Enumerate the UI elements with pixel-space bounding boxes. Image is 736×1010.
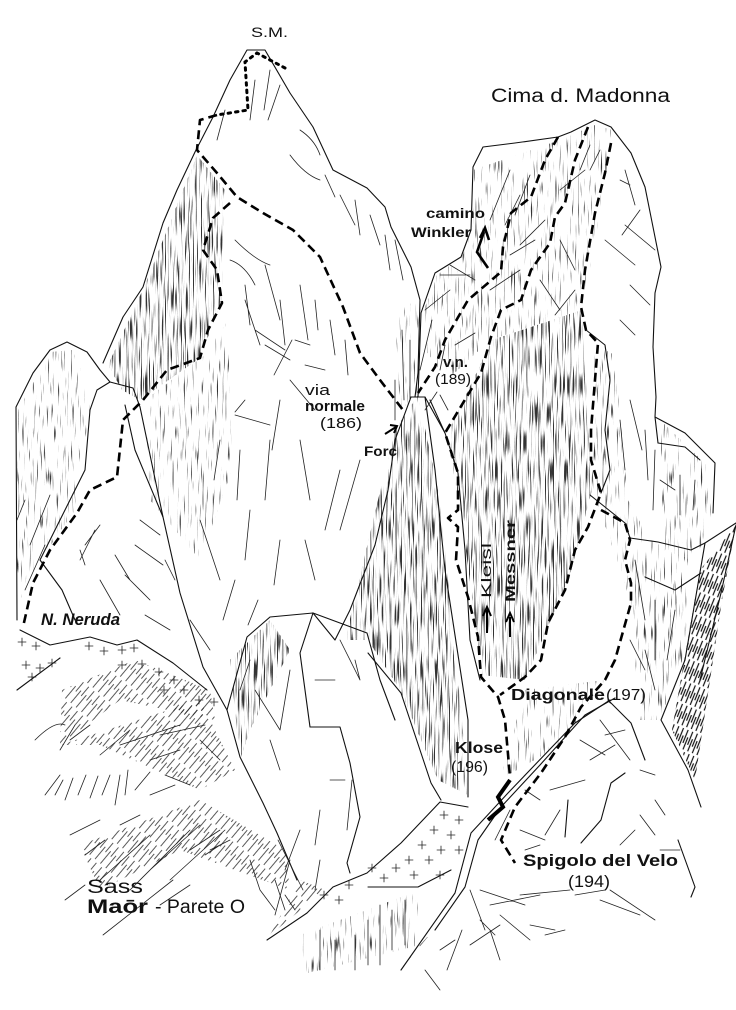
route: Spigolo del Velo [501,510,631,863]
label: Kleisl: Kleisl [478,543,494,598]
label: Spigolo del Velo 194: (194) [568,872,610,891]
label: Diagonale 197 [511,687,646,704]
label: Diagonale 197: (197) [606,687,646,704]
label: camino Winkler: camino [426,205,485,221]
label: Sass Maor - Parete O [87,877,245,918]
arrow: Kleisl [483,607,491,633]
cross marks on scree [18,638,463,904]
label: Sass Maor - Parete O: - Parete O [155,897,245,918]
label: via normale 186: via [305,382,331,399]
dense vertical shading [17,125,712,975]
Neruda base [20,630,207,690]
lower ridge and chimney [401,700,610,970]
central ridge [430,400,705,550]
Sass Maor outline [103,50,420,397]
label: Sass Maor - Parete O: Sass [87,877,143,898]
label: Sass Maor - Parete O: Maōr [87,897,149,918]
right pillar [661,523,736,807]
label: Klose 196: (196) [451,759,488,776]
route: v.n. 189 [418,137,558,393]
label: N. Neruda: N. Neruda [41,610,120,629]
arrow: camino Winkler [477,228,489,268]
route: summit dotted [217,53,285,115]
couloir and pinnacle [227,397,411,710]
route: Kleisl [445,127,588,777]
dihedral [565,773,695,897]
route: N. Neruda [23,203,230,627]
route: via normale 186 [197,115,403,410]
label: Diagonale 197: Diagonale [511,687,605,704]
arrows [385,228,514,637]
label: v.n. 189: (189) [435,371,471,388]
label: camino Winkler: Winkler [411,224,472,240]
label: via normale 186 [305,382,365,432]
label: Cima d. Madonna: Cima d. Madonna [491,86,671,107]
small peak [16,342,297,880]
arrow: Forc [385,425,397,434]
big lower pillar [300,613,360,873]
lower left slope strokes [35,724,295,935]
label: v.n. 189 [435,354,471,388]
label: Spigolo del Velo 194 [523,851,678,891]
label: via normale 186: (186) [320,415,362,432]
label: Messner: Messner [502,519,518,602]
label: camino Winkler [411,205,485,240]
label: via normale 186: normale [305,398,365,415]
climbing routes [23,53,631,863]
label: S.M.: S.M. [251,24,288,40]
route: Klose solid start [488,780,510,820]
labels [41,24,678,918]
label: Klose 196 [451,740,503,776]
label: Spigolo del Velo 194: Spigolo del Velo [523,851,678,870]
label: Klose 196: Klose [455,740,503,757]
route: Messner and Diagonale [500,143,611,695]
label: v.n. 189: v.n. [443,354,468,371]
arrow: Messner [506,613,514,637]
Cima della Madonna outline [418,120,715,513]
diagonal scree and slope hatching [60,525,736,970]
label: Forc: Forc [364,443,397,459]
